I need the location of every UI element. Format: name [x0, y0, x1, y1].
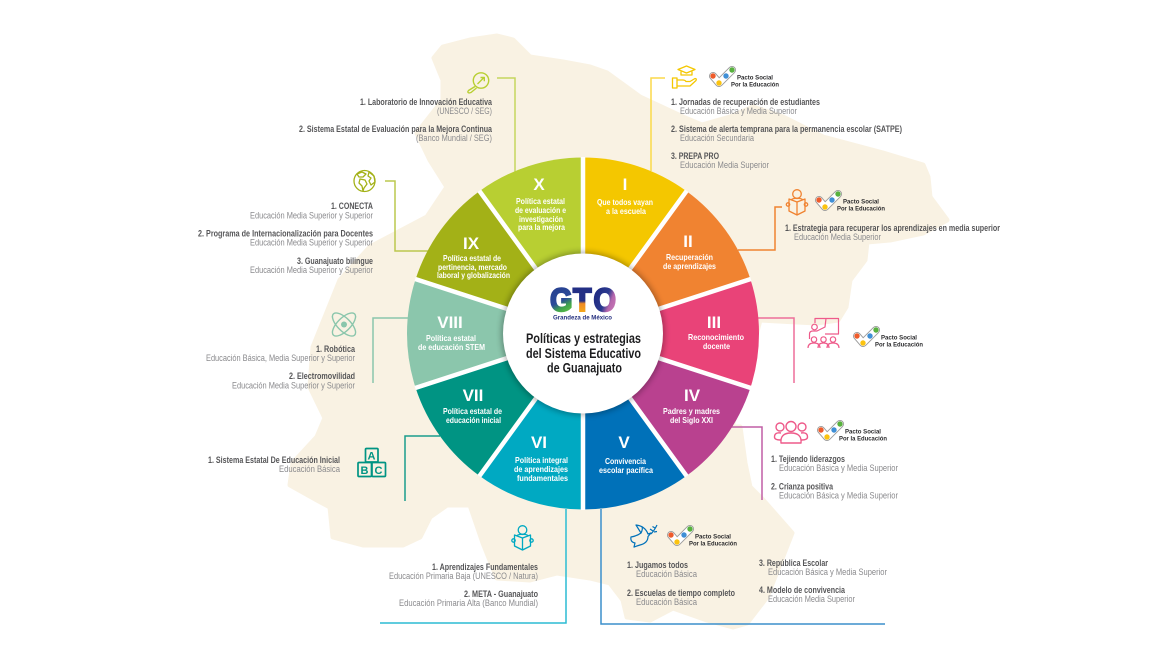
text: programs V: Educación Básica — [636, 597, 697, 607]
logo: Pacto Social — [818, 421, 887, 442]
label: V: escolar pacífica — [599, 465, 653, 475]
text: programs VIII — [206, 344, 355, 390]
text: programs V: 2. Escuelas de tiempo completo — [627, 588, 736, 598]
text: programs IX: 1. CONECTA — [331, 201, 374, 211]
panel: IV — [771, 421, 898, 500]
logo: Pacto Social: Por la Educación — [875, 342, 923, 348]
text: programs II: 1. Estrategia para recuperar los aprendizajes en media superior — [785, 223, 1000, 233]
text: programs VII: Educación Básica — [279, 464, 340, 474]
label: IV — [663, 386, 720, 425]
segment IV — [583, 334, 750, 476]
label: VII: educación inicial — [446, 415, 501, 425]
connector: IV — [730, 427, 762, 500]
text: programs VII — [208, 455, 340, 474]
label: IX: Política estatal de — [443, 253, 501, 263]
central title: de Guanajuato — [547, 360, 622, 376]
panel: VII — [208, 448, 386, 477]
text: programs VI: 1. Aprendizajes Fundamentales — [432, 562, 538, 572]
label: III: Reconocimiento — [688, 332, 744, 342]
label: II: Recuperación — [666, 252, 713, 262]
segment VIII — [407, 279, 583, 388]
segment VII — [416, 334, 583, 476]
logo: Pacto Social: Pacto Social — [843, 198, 879, 206]
logo: Pacto Social: Por la Educación — [689, 540, 737, 548]
connector: VIII — [373, 318, 410, 383]
label: II: II — [683, 232, 693, 251]
label: VII: VII — [463, 386, 483, 405]
icon: globe — [354, 170, 375, 192]
label: V — [599, 433, 653, 475]
text: programs V: 4. Modelo de convivencia — [759, 585, 845, 595]
connector: V — [601, 509, 885, 624]
label: X: Política estatal — [516, 196, 565, 206]
panel: III — [808, 318, 923, 348]
text: programs II — [785, 223, 1000, 242]
text: programs V: Educación Media Superior — [768, 594, 855, 604]
text: programs VIII: Educación Básica, Media Superior y Superior — [206, 353, 355, 363]
logo: Pacto Social — [710, 67, 779, 88]
segment II — [583, 191, 750, 334]
text: programs IX — [198, 201, 374, 275]
text: programs I: Educación Secundaria — [680, 133, 754, 143]
icon: ABC blocks: B — [360, 465, 368, 477]
panel: IX — [198, 170, 375, 275]
icon: teacher at board — [808, 318, 839, 348]
icon: reader — [512, 526, 533, 550]
label: V: V — [618, 433, 630, 452]
logo: Pacto Social — [854, 327, 923, 348]
label: X: X — [533, 175, 545, 194]
text: programs I — [671, 97, 902, 170]
text: programs II: Educación Media Superior — [794, 232, 881, 242]
logo: Pacto Social: Por la Educación — [837, 206, 885, 212]
text: programs X — [299, 97, 492, 143]
icon: dove with branch — [631, 525, 657, 547]
wheel of ten policies — [407, 157, 759, 510]
segment VI — [480, 334, 583, 510]
text: programs IV: 2. Crianza positiva — [771, 482, 833, 492]
text: programs I: Educación Media Superior — [680, 160, 769, 170]
text: programs VIII: 2. Electromovilidad — [289, 371, 355, 381]
connector: III — [756, 318, 794, 383]
panel: VIII — [206, 309, 359, 390]
text: programs V: 3. República Escolar — [759, 558, 828, 568]
text: programs IX: Educación Media Superior y Superior — [250, 210, 373, 220]
segment III — [583, 279, 759, 388]
text: programs I: 2. Sistema de alerta temprana para la permanencia escolar (SATPE) — [671, 124, 902, 134]
icon: magnifier with arrow — [468, 73, 489, 93]
background map of Guanajuato — [290, 36, 947, 627]
logo: Pacto Social: Por la Educación — [731, 82, 779, 88]
text: programs VIII: Educación Media Superior y Superior — [232, 380, 355, 390]
connector: I — [651, 78, 665, 171]
label: VI: Política integral — [515, 455, 568, 465]
logo: Pacto Social: Pacto Social — [845, 428, 881, 436]
icon: ABC blocks — [358, 448, 386, 477]
text: programs I: Educación Básica y Media Superior — [680, 106, 797, 116]
label: X — [515, 175, 566, 232]
text: programs V — [627, 558, 887, 607]
label: VIII — [418, 313, 485, 352]
panel: V — [627, 525, 887, 607]
text: programs X: 1. Laboratorio de Innovación Educativa — [360, 97, 492, 107]
icon: atom — [329, 309, 359, 340]
label: I — [597, 175, 653, 216]
text: programs IX: Educación Media Superior y Superior — [250, 238, 373, 248]
logo: Pacto Social: Pacto Social — [695, 534, 731, 540]
text: programs V: 1. Jugamos todos — [627, 560, 688, 570]
text: programs IV: Educación Básica y Media Superior — [779, 463, 898, 473]
label: X: de evaluación e — [515, 205, 566, 215]
text: programs V: Educación Básica — [636, 569, 697, 579]
central title: Políticas y estrategias — [526, 331, 641, 346]
label: I: Que todos vayan — [597, 197, 653, 207]
GTO logo: T — [573, 282, 592, 318]
text: programs VI: 2. META - Guanajuato — [464, 589, 539, 599]
panel: X — [299, 73, 492, 143]
icon: reader — [786, 190, 808, 215]
logo: Pacto Social — [816, 191, 885, 212]
icon: graduation cap on hand — [672, 66, 696, 88]
label: IX: pertinencia, mercado — [438, 262, 507, 272]
label: X: investigación — [519, 214, 563, 224]
connector: II — [738, 207, 782, 250]
central title: del Sistema Educativo — [526, 346, 641, 361]
label: X: para la mejora — [518, 222, 565, 232]
label: VI — [514, 433, 568, 483]
segment X — [480, 158, 583, 334]
GTO logo: O — [594, 282, 616, 318]
label: IX: IX — [463, 234, 480, 253]
text: programs VI: Educación Primaria Baja (UNESCO / Natura) — [389, 571, 538, 581]
label: III — [688, 313, 744, 351]
text: programs IV: 1. Tejiendo liderazgos — [771, 454, 845, 464]
label: VIII: VIII — [437, 313, 463, 332]
icon: ABC blocks: A — [368, 450, 376, 462]
GTO logo: Grandeza de México — [553, 316, 612, 322]
label: I: a la escuela — [606, 206, 646, 216]
connector: X — [497, 78, 515, 174]
text: programs I: 3. PREPA PRO — [671, 151, 719, 161]
text: programs IX: Educación Media Superior y Superior — [250, 265, 373, 275]
text: programs X: (Banco Mundial / SEG) — [416, 133, 492, 143]
text: programs X: (UNESCO / SEG) — [437, 106, 492, 116]
segment I — [583, 158, 686, 334]
panel: I — [671, 66, 902, 170]
text: programs IX: 3. Guanajuato bilingue — [297, 256, 373, 266]
text: programs V: Educación Básica y Media Superior — [768, 567, 887, 577]
GTO logo: G — [550, 282, 572, 318]
connector: VII — [405, 436, 440, 501]
label: VI: de aprendizajes — [514, 464, 568, 474]
label: II — [663, 232, 716, 271]
text: programs IV: Educación Básica y Media Superior — [779, 490, 898, 500]
label: VIII: Política estatal — [426, 333, 476, 343]
GTO logo — [550, 282, 616, 322]
logo: Pacto Social: Por la Educación — [839, 436, 887, 442]
label: VI: fundamentales — [517, 473, 568, 483]
connector: IX — [385, 181, 430, 251]
panel: VI — [389, 526, 539, 608]
text: programs IX: 2. Programa de Internacionalización para Docentes — [198, 228, 373, 238]
central title — [526, 331, 641, 376]
label: IV: del Siglo XXI — [670, 415, 713, 425]
icon: ABC blocks: C — [374, 465, 382, 477]
label: IV: IV — [684, 386, 701, 405]
label: II: de aprendizajes — [663, 261, 716, 271]
text: programs I: 1. Jornadas de recuperación de estudiantes — [671, 97, 820, 107]
label: VI: VI — [531, 433, 547, 452]
label: IX — [437, 234, 510, 280]
label: III: III — [707, 313, 721, 332]
label: VIII: de educación STEM — [418, 342, 485, 352]
label: III: docente — [703, 341, 730, 351]
logo: Pacto Social: Pacto Social — [737, 74, 773, 82]
text: programs VI — [389, 562, 539, 608]
label: VII: Política estatal de — [443, 406, 502, 416]
segment V — [583, 334, 686, 510]
logo: Pacto Social — [668, 526, 737, 548]
logo: Pacto Social: Pacto Social — [881, 334, 917, 342]
connector: VI — [380, 509, 566, 623]
segment IX — [416, 191, 583, 334]
text: programs X: 2. Sistema Estatal de Evaluación para la Mejora Continua — [299, 124, 492, 134]
label: V: Convivencia — [605, 456, 646, 466]
text: programs VIII: 1. Robótica — [316, 344, 355, 354]
label: VII — [443, 386, 502, 425]
label: IX: laboral y globalización — [437, 270, 510, 280]
label: I: I — [623, 175, 627, 194]
icon: group of people — [774, 422, 808, 443]
label: IV: Padres y madres — [663, 406, 720, 416]
text: programs IV — [771, 454, 898, 500]
text: programs VI: Educación Primaria Alta (Banco Mundial) — [399, 598, 538, 608]
text: programs VII: 1. Sistema Estatal De Educación Inicial — [208, 455, 340, 465]
panel: II — [785, 190, 1000, 242]
